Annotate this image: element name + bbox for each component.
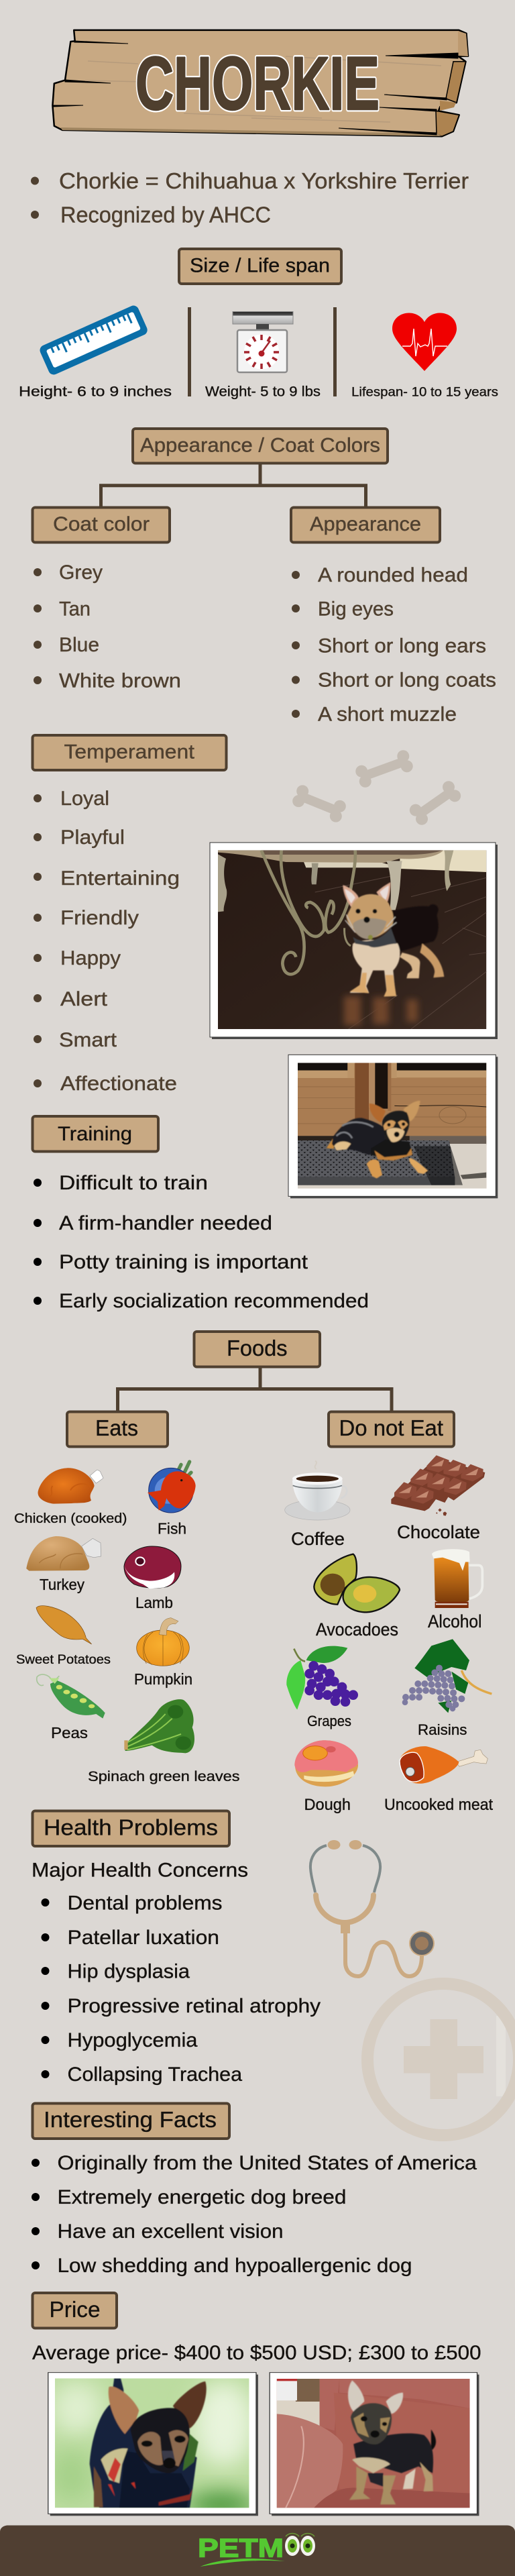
food: avocados: Avocadoes [316, 1619, 398, 1640]
heading: appearance / coat colors [133, 429, 388, 463]
food: dough [294, 1740, 358, 1814]
list: appearance [292, 564, 496, 726]
food: spinach: Spinach green leaves [88, 1769, 240, 1784]
divider [188, 307, 191, 396]
food: fish: Fish [158, 1520, 186, 1538]
text: major health concerns: Major Health Concerns [32, 1860, 248, 1881]
food: chocolate: Chocolate [397, 1522, 480, 1542]
heading: price [32, 2293, 117, 2328]
list: interesting facts [32, 2152, 477, 2277]
list: training [34, 1172, 369, 1312]
list: training: Early socialization recommended [59, 1290, 369, 1312]
food: uncooked meat [384, 1746, 493, 1814]
list: interesting facts: Have an excellent vision [58, 2220, 284, 2243]
list: appearance: Short or long coats [318, 669, 496, 691]
connector: foods tree [118, 1366, 392, 1411]
list: temperament: Playful [60, 826, 125, 849]
food: coffee [285, 1461, 350, 1549]
title: wooden sign: CHORKIE [135, 42, 380, 125]
list: temperament: Entertaining [60, 867, 180, 890]
heading: interesting facts [32, 2104, 229, 2139]
heading: price: Price [50, 2297, 101, 2322]
heading: temperament: Temperament [64, 741, 195, 763]
list: temperament: Happy [60, 947, 121, 969]
heading: appearance: Appearance [310, 513, 421, 535]
food: raisins: Raisins [418, 1721, 467, 1738]
list: temperament [34, 788, 180, 1095]
heading: foods [194, 1332, 320, 1367]
heading: health problems [32, 1811, 229, 1846]
footer bar [0, 2525, 515, 2576]
list: coat colors: White brown [59, 669, 181, 692]
heading: eats [67, 1411, 168, 1446]
heading: appearance [291, 507, 440, 542]
divider [333, 307, 337, 396]
list: temperament: Affectionate [60, 1073, 177, 1095]
list: health problems: Patellar luxation [67, 1927, 219, 1949]
heading: size / life span [179, 249, 341, 284]
food: sweet potatoes [16, 1606, 111, 1667]
list: temperament: Friendly [60, 907, 139, 929]
heading: do not eat: Do not Eat [339, 1415, 443, 1440]
food: alcohol: Alcohol [428, 1611, 481, 1631]
list: temperament: Loyal [60, 788, 109, 810]
decoration: bones [290, 749, 463, 827]
photo: dog on green background [48, 2373, 258, 2518]
heading: coat color: Coat color [53, 513, 150, 535]
photo: dog standing under table [210, 843, 498, 1039]
list: training: Difficult to train [59, 1172, 208, 1194]
food: pumpkin [134, 1618, 192, 1688]
food: coffee: Coffee [291, 1529, 345, 1549]
icon: stethoscope [310, 1840, 435, 1976]
food: fish [148, 1462, 196, 1538]
list: health problems: Hip dysplasia [67, 1960, 190, 1983]
food: turkey [26, 1536, 101, 1593]
photo: dog lying on doormat [288, 1055, 498, 1198]
food: sweet potatoes: Sweet Potatoes [16, 1653, 111, 1667]
intro bullets [31, 168, 469, 227]
food: peas [37, 1674, 105, 1741]
food: dough: Dough [304, 1796, 351, 1814]
list: training: A firm-handler needed [59, 1212, 272, 1234]
list: coat colors: Grey [59, 561, 103, 584]
list: health problems: Dental problems [67, 1892, 223, 1915]
list: training: Potty training is important [59, 1251, 308, 1273]
connector: appearance tree [101, 463, 366, 507]
list: temperament: Smart [59, 1029, 117, 1051]
heading: eats: Eats [95, 1415, 138, 1440]
intro bullets: Chorkie = Chihuahua x Yorkshire Terrier [59, 168, 469, 193]
text: average price: Average price- $400 to $500 USD; £300 to £500 [32, 2342, 481, 2364]
logo: petmoo [198, 2533, 315, 2567]
food: uncooked meat: Uncooked meat [384, 1796, 493, 1814]
food: avocados [314, 1554, 400, 1640]
title text: CHORKIE [135, 42, 380, 125]
list: interesting facts: Extremely energetic dog breed [58, 2186, 346, 2208]
list: coat colors: Blue [59, 634, 99, 656]
food: chocolate [391, 1455, 485, 1542]
food: lamb [124, 1546, 181, 1611]
logo: petmoo: PETM [198, 2534, 284, 2563]
food: chicken: Chicken (cooked) [14, 1511, 127, 1526]
list: health problems: Progressive retinal atrophy [67, 1995, 321, 2017]
food: chicken [14, 1468, 127, 1526]
list: appearance: A rounded head [318, 564, 468, 586]
food: alcohol [428, 1549, 482, 1631]
heading: coat color [32, 507, 170, 542]
food: raisins [402, 1639, 492, 1738]
icon: heart with pulse [392, 313, 457, 371]
size labels: Lifespan- 10 to 15 years [351, 385, 498, 400]
heading: health problems: Health Problems [44, 1815, 218, 1839]
size labels [19, 384, 498, 400]
list: health problems: Hypoglycemia [67, 2029, 198, 2051]
photo: puppy on red armchair [270, 2373, 479, 2516]
heading: temperament [32, 735, 227, 770]
heading: foods: Foods [227, 1336, 287, 1360]
list: appearance: Short or long ears [318, 635, 486, 657]
food: grapes [286, 1646, 358, 1729]
intro bullets: Recognized by AHCC [60, 203, 271, 227]
icon: ruler [38, 304, 149, 376]
size labels: Weight- 5 to 9 lbs [205, 384, 321, 400]
list: appearance: A short muzzle [318, 703, 457, 726]
size labels: Height- 6 to 9 inches [19, 384, 172, 400]
heading: appearance / coat colors: Appearance / Coat Colors [140, 435, 380, 456]
food: peas: Peas [51, 1724, 88, 1741]
food: grapes: Grapes [307, 1713, 351, 1729]
decoration: medical cross badge [367, 1984, 515, 2135]
list: health problems [42, 1892, 321, 2086]
food: turkey: Turkey [40, 1576, 84, 1593]
food: pumpkin: Pumpkin [134, 1670, 192, 1688]
heading: do not eat [329, 1411, 454, 1446]
list: interesting facts: Low shedding and hypoallergenic dog [58, 2255, 412, 2277]
list: health problems: Collapsing Trachea [67, 2063, 242, 2086]
list: coat colors: Tan [59, 598, 91, 620]
heading: training [32, 1116, 158, 1151]
list: interesting facts: Originally from the United States of America [58, 2152, 477, 2174]
heading: training: Training [58, 1123, 132, 1145]
list: coat colors [34, 561, 181, 692]
title: wooden sign [52, 30, 468, 136]
list: temperament: Alert [60, 988, 108, 1010]
icon: weighing scale [233, 311, 293, 372]
list: appearance: Big eyes [318, 598, 394, 620]
heading: size / life span: Size / Life span [190, 255, 330, 276]
heading: interesting facts: Interesting Facts [44, 2107, 217, 2132]
food: spinach [88, 1699, 240, 1784]
food: lamb: Lamb [135, 1594, 173, 1611]
